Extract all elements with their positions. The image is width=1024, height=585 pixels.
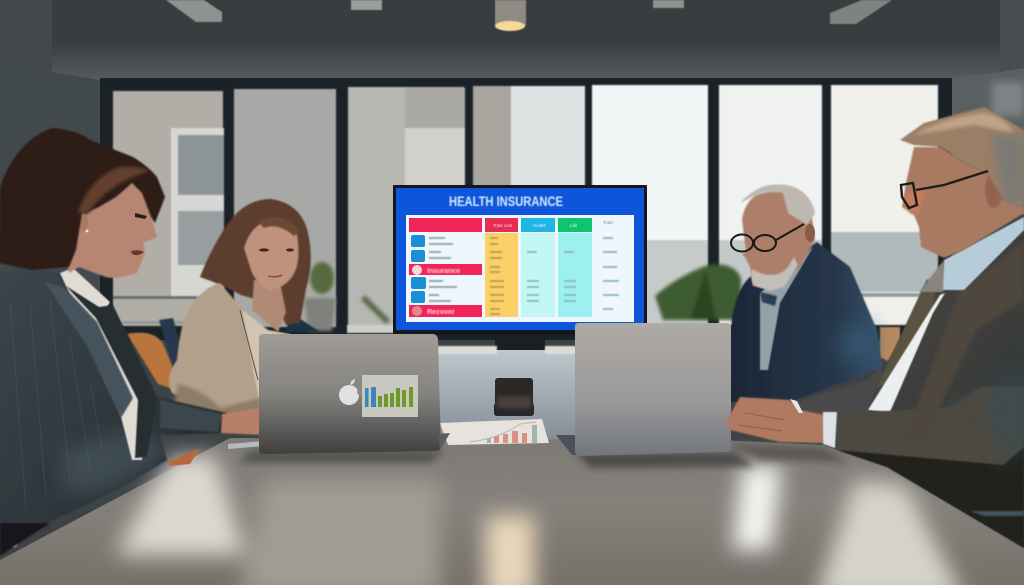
far sleeve: [797, 368, 887, 416]
laptop left: [259, 334, 450, 454]
shirt: [868, 293, 945, 412]
cuffs: [823, 412, 837, 448]
monitor: [393, 185, 647, 350]
foreground chair right: [970, 511, 1024, 516]
hair: [900, 107, 1024, 207]
screen table: Life: [570, 223, 578, 228]
shirt: [760, 247, 813, 370]
suit stripes: [10, 300, 102, 510]
neck and face: [61, 183, 157, 278]
shirt: [60, 268, 144, 460]
screen table: [406, 215, 634, 322]
glasses: [731, 224, 804, 252]
screen table: Total cost: [493, 223, 513, 228]
pen: [228, 441, 264, 449]
face: [902, 147, 1024, 258]
sleeve highlight: [60, 432, 166, 494]
jacket: [730, 242, 882, 402]
plants: [304, 262, 741, 331]
sticker chart: [362, 375, 418, 417]
foreground chair left: [0, 523, 52, 556]
laptop right: [556, 323, 731, 456]
collar: [941, 217, 1024, 290]
screen table: Health: [533, 223, 547, 228]
jacket body: [867, 222, 1024, 446]
phone: [494, 378, 534, 416]
left lapel: [877, 280, 937, 387]
jacket: [169, 283, 288, 417]
hair: [0, 128, 165, 270]
suit: [0, 267, 227, 523]
person: man in grey jacket: [727, 107, 1024, 548]
ear: [805, 224, 815, 242]
neck: [252, 280, 286, 332]
sheet of chart paper: [440, 419, 549, 445]
hair: [740, 185, 815, 225]
table: [0, 346, 1024, 585]
lapel: [66, 286, 157, 458]
chairs: [127, 312, 900, 388]
head: [742, 188, 815, 290]
person: older man in navy jacket: [730, 185, 882, 402]
screen table: Insurance: [427, 268, 460, 275]
screen table: Recover: [427, 309, 455, 316]
window: [100, 78, 952, 340]
beard: [751, 257, 798, 291]
hand: [221, 408, 263, 435]
near hand: [727, 397, 825, 443]
screen table: Total: [603, 220, 613, 225]
sleeve: [837, 387, 1024, 465]
screen heading: HEALTH INSURANCE: [449, 194, 563, 209]
lower body shadow: [837, 445, 1024, 548]
hair: [200, 199, 311, 325]
ear: [985, 172, 1003, 208]
orange strip: [168, 448, 200, 466]
glasses: [901, 171, 988, 208]
apple logo: [339, 379, 363, 405]
person: woman in grey suit: [0, 128, 264, 523]
face: [244, 222, 298, 290]
eye and mouth: [135, 213, 147, 219]
ceiling lights: [166, 0, 892, 31]
ear: [78, 213, 88, 231]
person: woman in beige jacket: [169, 199, 311, 418]
